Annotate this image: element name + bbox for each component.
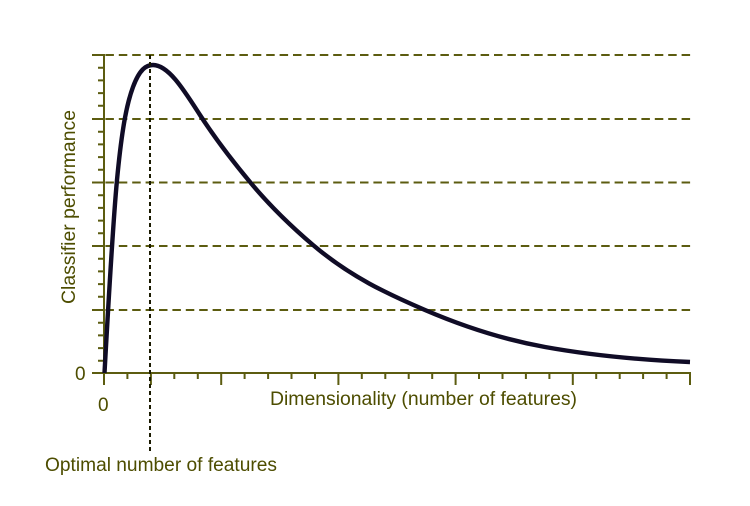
optimal features dotted marker line	[149, 55, 151, 451]
y axis label: Classifier performance	[59, 110, 80, 304]
x origin label: 0	[98, 395, 109, 416]
performance curve	[104, 65, 690, 373]
y origin label: 0	[75, 364, 86, 385]
horizontal dashed gridlines	[92, 55, 691, 310]
optimal number of features label: Optimal number of features	[45, 455, 277, 476]
y axis with tick marks	[92, 54, 104, 374]
x axis with tick marks	[92, 373, 691, 385]
x axis label: Dimensionality (number of features)	[270, 389, 577, 410]
